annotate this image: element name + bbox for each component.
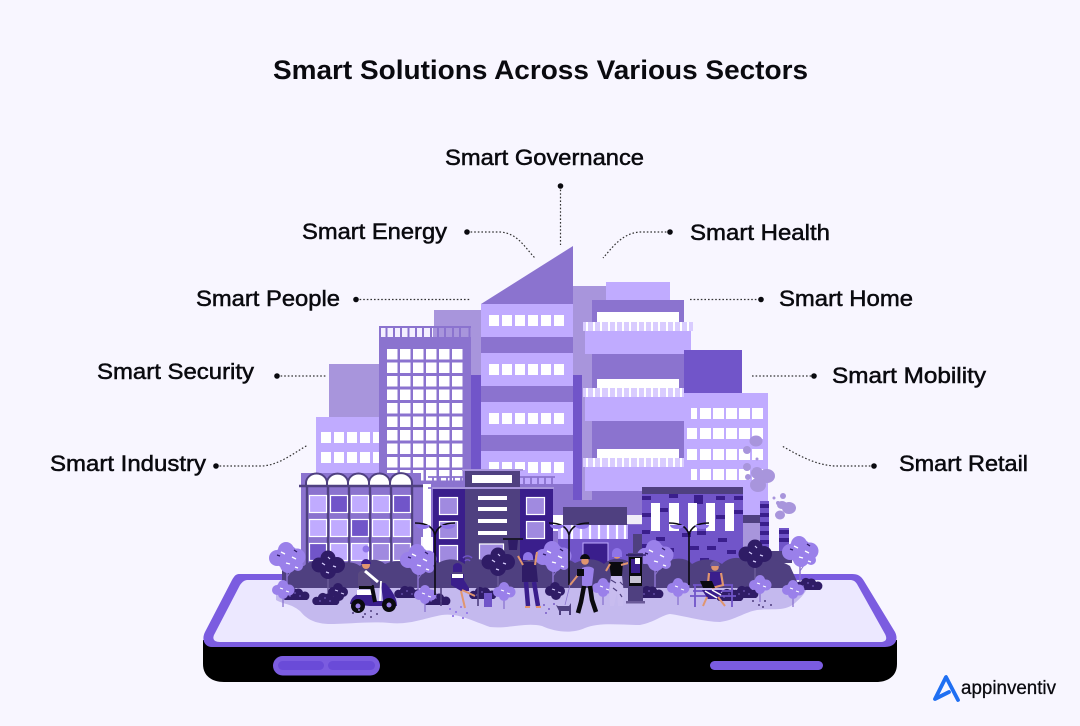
label: Smart Governance: Smart Governance bbox=[445, 145, 644, 170]
trees and shrubs bbox=[269, 536, 822, 612]
label: Smart People: Smart People bbox=[196, 286, 340, 311]
label: Smart Security: Smart Security bbox=[97, 359, 254, 384]
woman with arms raised bbox=[518, 552, 541, 607]
phone screen frame bbox=[203, 574, 897, 647]
building: grid tower bbox=[379, 327, 471, 550]
city buildings front layer bbox=[299, 469, 792, 575]
building: brick factory bbox=[642, 487, 792, 572]
person on bench with phone bbox=[440, 556, 492, 608]
person on scooter bbox=[350, 546, 397, 613]
building: arched facade bbox=[299, 473, 423, 575]
city buildings back layer bbox=[316, 246, 796, 550]
man walking dog bbox=[556, 554, 596, 615]
ground speckles bbox=[352, 600, 772, 619]
hedge row bbox=[282, 558, 800, 588]
sector labels bbox=[50, 145, 1028, 476]
home button bbox=[273, 656, 380, 676]
building: right balcony tower bbox=[573, 282, 693, 535]
label: Smart Mobility: Smart Mobility bbox=[832, 363, 986, 388]
information kiosk bbox=[626, 553, 646, 604]
street lamps bbox=[415, 523, 709, 595]
logo: appinventiv bbox=[935, 677, 1056, 700]
label: Smart Home: Smart Home bbox=[779, 286, 913, 311]
label: Smart Energy: Smart Energy bbox=[302, 219, 447, 244]
phone body bbox=[203, 640, 897, 682]
label: Smart Health: Smart Health bbox=[690, 220, 830, 245]
drone bbox=[503, 539, 523, 550]
woman using kiosk bbox=[606, 548, 632, 606]
ground blob bbox=[276, 580, 808, 632]
speaker bar bbox=[710, 661, 823, 670]
title: Smart Solutions Across Various Sectors bbox=[273, 55, 808, 85]
logo wordmark: appinventiv bbox=[961, 678, 1056, 699]
woman with laptop on bench bbox=[690, 561, 736, 607]
dotted leader lines bbox=[213, 183, 877, 469]
logo mark bbox=[935, 677, 958, 700]
label: Smart Industry: Smart Industry bbox=[50, 451, 206, 476]
smoke clouds bbox=[743, 436, 796, 520]
building: right block with windows bbox=[684, 350, 768, 543]
building: shop with awning bbox=[553, 500, 643, 575]
phone screen bbox=[213, 580, 886, 642]
building: dark purple block bbox=[428, 469, 555, 573]
building: back left blocks bbox=[316, 310, 482, 485]
label: Smart Retail: Smart Retail bbox=[899, 451, 1028, 476]
building: central sloped tower bbox=[481, 246, 573, 504]
phone base bbox=[203, 574, 897, 682]
